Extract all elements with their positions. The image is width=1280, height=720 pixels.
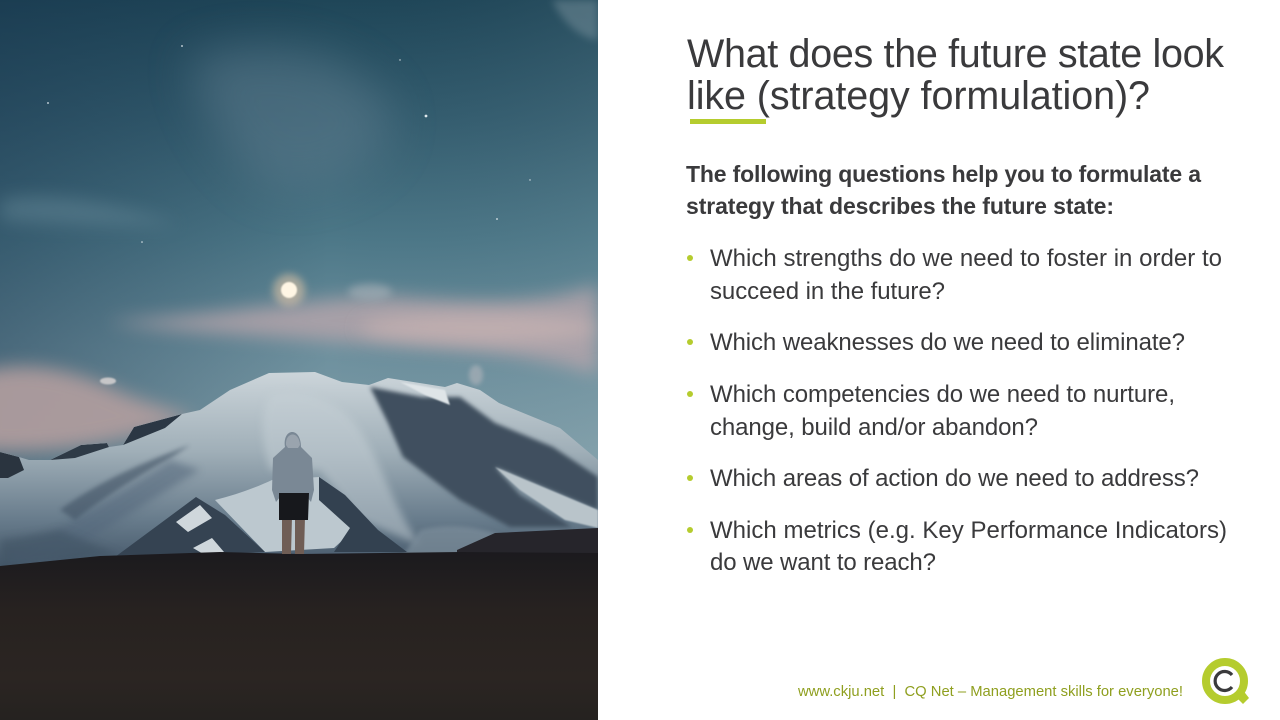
ground (0, 528, 598, 720)
intro text (686, 161, 1201, 219)
title accent underline (690, 119, 766, 124)
question 1: Which strengths do we need to foster in order to (710, 245, 1222, 272)
question 4: Which areas of action do we need to address? (710, 465, 1199, 492)
question 5 (687, 517, 1227, 576)
lower snow slope (215, 477, 357, 552)
lower left peak (115, 497, 265, 557)
question 1: succeed in the future? (710, 278, 945, 305)
photo: man looking at a snowy mountain under a moonlit sky (0, 0, 600, 720)
question list (687, 245, 1227, 576)
question 3 (687, 381, 1175, 441)
title (687, 32, 1224, 124)
intro text: The following questions help you to formulate a (686, 161, 1201, 187)
moon (273, 274, 305, 306)
clouds (0, 284, 600, 451)
sky (0, 0, 598, 480)
question 2: Which weaknesses do we need to eliminate? (710, 329, 1185, 356)
intro text: strategy that describes the future state: (686, 193, 1114, 219)
question 3: Which competencies do we need to nurture, (710, 381, 1175, 408)
stars (47, 45, 531, 243)
question 1 (687, 245, 1222, 305)
lower dark ridge (319, 477, 407, 552)
logo: CQ (1206, 662, 1249, 704)
question 5: do we want to reach? (710, 549, 936, 576)
person (272, 432, 314, 554)
title: What does the future state look (687, 32, 1224, 76)
title: like (strategy formulation)? (687, 74, 1150, 118)
question 3: change, build and/or abandon? (710, 414, 1038, 441)
footer text: www.ckju.net | CQ Net – Management skills for everyone! (797, 684, 1183, 700)
question 5: Which metrics (e.g. Key Performance Indicators) (710, 517, 1227, 544)
mountain (0, 372, 598, 570)
